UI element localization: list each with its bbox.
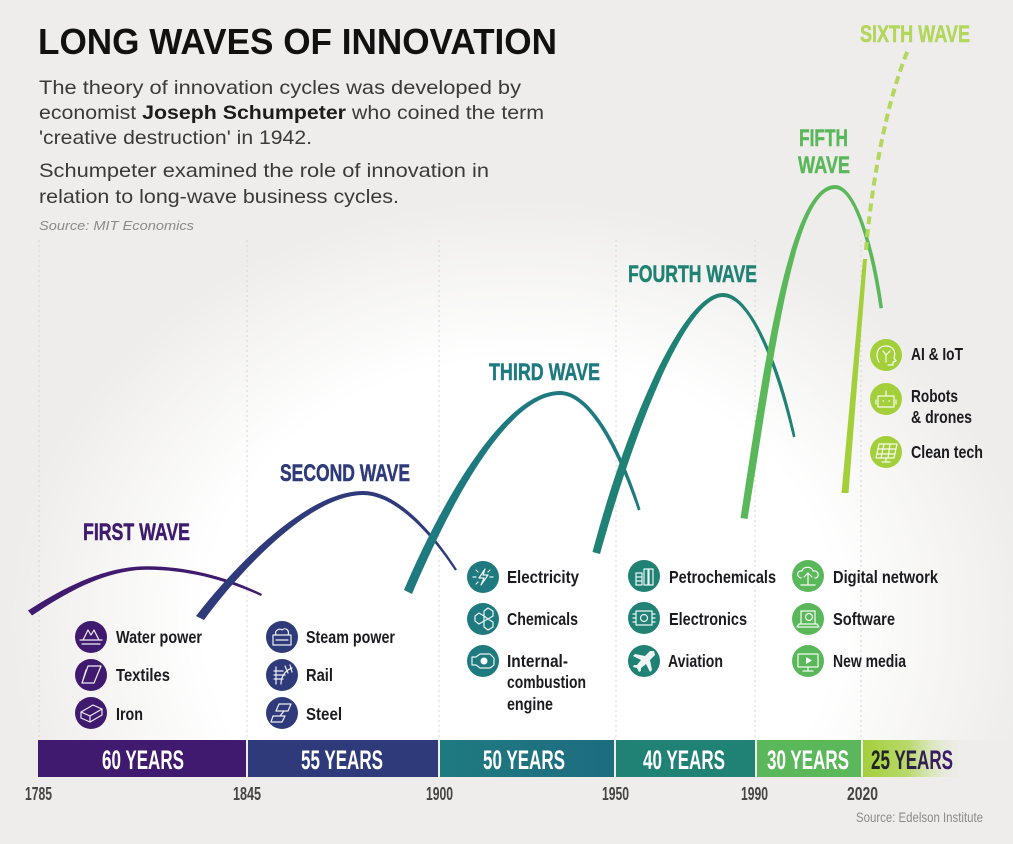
bar: 55 years: 55 YEARS <box>301 745 383 775</box>
text: steel: Steel <box>306 704 342 724</box>
intro text: economist Joseph Schumpeter who coined the term <box>39 102 544 124</box>
icon: textiles <box>75 659 107 691</box>
label: fourth wave: FOURTH WAVE <box>628 261 757 288</box>
text: internal-combustion engine: combustion <box>507 672 586 692</box>
label: fifth wave <box>798 125 850 179</box>
icon: software <box>792 603 824 635</box>
timeline bar <box>38 740 993 777</box>
intro text: 'creative destruction' in 1942. <box>39 127 312 149</box>
timeline years: 2020 <box>847 784 878 804</box>
text: chemicals: Chemicals <box>507 609 578 629</box>
icon: robots and drones <box>870 383 902 415</box>
fourth wave curve <box>592 293 796 554</box>
text: electricity: Electricity <box>507 567 579 587</box>
intro text: Schumpeter examined the role of innovation in <box>39 160 489 182</box>
text: digital network: Digital network <box>833 567 938 587</box>
timeline years: 1990 <box>741 784 768 804</box>
bar: 30 years: 30 YEARS <box>767 745 849 775</box>
text: aviation: Aviation <box>668 651 723 671</box>
icon: steam power <box>266 621 298 653</box>
intro text <box>39 77 544 208</box>
sixth wave items <box>870 339 983 468</box>
bar: 50 years: 50 YEARS <box>483 745 565 775</box>
text: AI and IoT: AI & IoT <box>911 344 963 364</box>
icon: aviation <box>628 645 660 677</box>
icon: steel <box>266 697 298 729</box>
bar: 55 years <box>248 740 438 777</box>
sixth wave curve <box>842 259 867 493</box>
label: second wave: SECOND WAVE <box>280 460 410 487</box>
text: water power: Water power <box>116 627 202 647</box>
text: iron: Iron <box>116 704 143 724</box>
bar: 50 years <box>440 740 614 777</box>
icon: AI and IoT <box>870 339 902 371</box>
second wave items <box>266 621 395 729</box>
icon: new media <box>792 645 824 677</box>
timeline years: 1900 <box>426 784 453 804</box>
fifth wave items <box>792 560 938 677</box>
icon: rail <box>266 659 298 691</box>
third wave items <box>467 561 586 714</box>
bar: 40 years <box>616 740 755 777</box>
text: robots and drones <box>911 386 972 427</box>
icon: chemicals <box>467 603 499 635</box>
text: internal-combustion engine: engine <box>507 694 553 714</box>
icon: digital network <box>792 560 824 592</box>
text: clean tech: Clean tech <box>911 442 983 462</box>
label: fifth wave: WAVE <box>798 152 850 179</box>
second wave curve <box>196 491 457 620</box>
title: LONG WAVES OF INNOVATION <box>38 21 557 62</box>
icon: clean tech <box>870 436 902 468</box>
text: petrochemicals: Petrochemicals <box>669 567 776 587</box>
fourth wave items <box>628 560 776 677</box>
icon: water power <box>75 621 107 653</box>
label: sixth wave: SIXTH WAVE <box>860 21 970 48</box>
text: steam power: Steam power <box>306 627 395 647</box>
intro text: relation to long-wave business cycles. <box>39 186 399 208</box>
label: fifth wave: FIFTH <box>799 125 848 152</box>
label: third wave: THIRD WAVE <box>489 359 600 386</box>
icon: petrochemicals <box>628 560 660 592</box>
text: internal-combustion engine <box>507 651 586 714</box>
bar: 25 years: 25 YEARS <box>871 745 953 775</box>
fifth wave curve <box>740 185 883 519</box>
bar: 60 years: 60 YEARS <box>102 745 184 775</box>
icon: electronics <box>628 602 660 634</box>
icon: iron <box>75 697 107 729</box>
first wave curve <box>28 566 262 616</box>
icon: electricity <box>467 561 499 593</box>
bar: 60 years <box>38 740 246 777</box>
text: robots and drones: & drones <box>911 407 972 427</box>
text: software: Software <box>833 609 895 629</box>
text: rail: Rail <box>306 665 333 685</box>
bar: 30 years <box>757 740 861 777</box>
first wave items <box>75 621 202 729</box>
bar: 40 years: 40 YEARS <box>643 745 725 775</box>
sixth wave dashed projection <box>866 50 908 250</box>
source: MIT Economics: Source: MIT Economics <box>39 218 195 233</box>
text: electronics: Electronics <box>669 609 747 629</box>
third wave curve <box>404 391 640 594</box>
timeline years: 1845 <box>233 784 261 804</box>
timeline years: 1785 <box>25 784 52 804</box>
label: first wave: FIRST WAVE <box>83 519 190 546</box>
timeline years <box>25 784 878 804</box>
text: robots and drones: Robots <box>911 386 958 406</box>
intro text: The theory of innovation cycles was developed by <box>39 77 521 99</box>
timeline years: 1950 <box>602 784 629 804</box>
text: internal-combustion engine: Internal- <box>507 651 568 671</box>
text: textiles: Textiles <box>116 665 170 685</box>
text: new media: New media <box>833 651 906 671</box>
source: Edelson Institute: Source: Edelson Institute <box>856 809 983 825</box>
icon: internal-combustion engine <box>467 645 499 677</box>
